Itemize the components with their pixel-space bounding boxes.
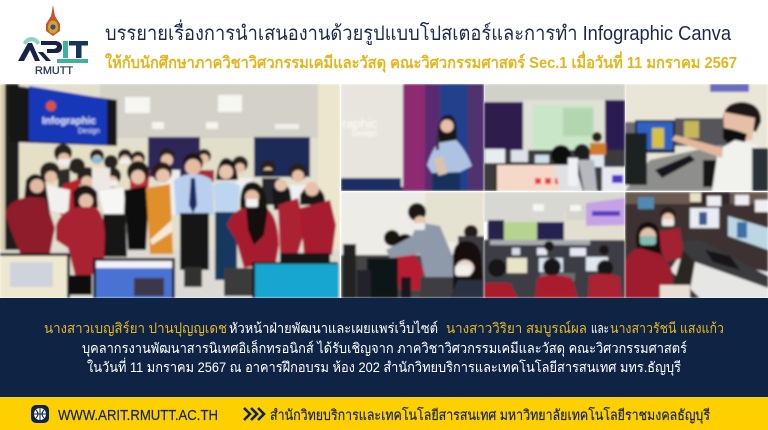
photo: group portrait in computer lab: Design [78,128,100,135]
yellow footer bar [0,397,768,430]
photo: wide view of computer classroom [484,192,625,298]
photo: instructor helping students [341,192,484,298]
text line 1: names and roles: นางสาวเบญสิร์ยา ปานปุญญเดช [44,320,227,337]
hijab student [272,182,293,210]
photo: man with mask pointing at monitor [625,84,768,191]
photo: group portrait in computer lab: Infographic [42,116,96,127]
text line 1: names and roles: หัวหน้าฝ่ายพัฒนาและเผยแพร่เว็บไซต์ [229,319,438,336]
icon: globe [31,405,49,423]
organisation name: สำนักวิทยบริการและเทคโนโลยีสารสนเทศ มหาวิทยาลัยเทคโนโลยีราชมงคลธัญบุรี [270,406,710,424]
text line 1: names and roles: นางสาววิริยา สมบูรณ์ผล [446,320,587,337]
text line 1: names and roles: และ [591,320,609,336]
front student in red jacket [73,185,98,208]
photo: students smiling with masks [625,192,768,298]
photo: speaker with microphone: Design [352,129,377,138]
left student in red jacket [23,172,51,214]
right student in red [300,185,326,205]
wall TV [10,85,117,146]
front right student in red [238,180,269,211]
white dividers between photos [340,84,768,298]
text line 3: date and venue: ในวันที่ 11 มกราคม 2567 ณ อาคารฝึกอบรม ห้อง 202 สำนักวิทยบริการและเทคโนโลยีสารสนเทศ มทร.ธัญบุรี [87,358,681,376]
photo: speaker with microphone [341,84,484,191]
back row [40,144,307,187]
man in blue shirt and tie [183,153,203,173]
navy information band [0,298,768,397]
text line 1: names and roles: นางสาวรัชนี แสงแก้ว [610,320,724,336]
woman in light blue [216,158,238,180]
black dress [127,161,149,183]
logo: ARIT RMUTT [18,5,88,77]
photo: group portrait in computer lab [0,84,340,298]
logo: ARIT RMUTT: RMUTT [35,65,73,77]
orange dress [152,162,172,182]
text line 2: invitation details: บุคลากรงานพัฒนาสารนิเทศอิเล็กทรอนิกส์ ได้รับเชิญจาก ภาควิชาวิศวกรรมเคมีและวัสดุ คณะวิศวกรรมศาสตร์ [82,339,687,357]
photo: presentation in classroom [484,84,625,191]
website address: WWW.ARIT.RMUTT.AC.TH [58,408,218,424]
photo: speaker with microphone: raphic [342,116,378,131]
monitors [0,253,70,298]
icon: triple chevron arrows [244,408,264,420]
student in white shirt [100,198,129,259]
text line 1: names and roles [44,319,724,337]
